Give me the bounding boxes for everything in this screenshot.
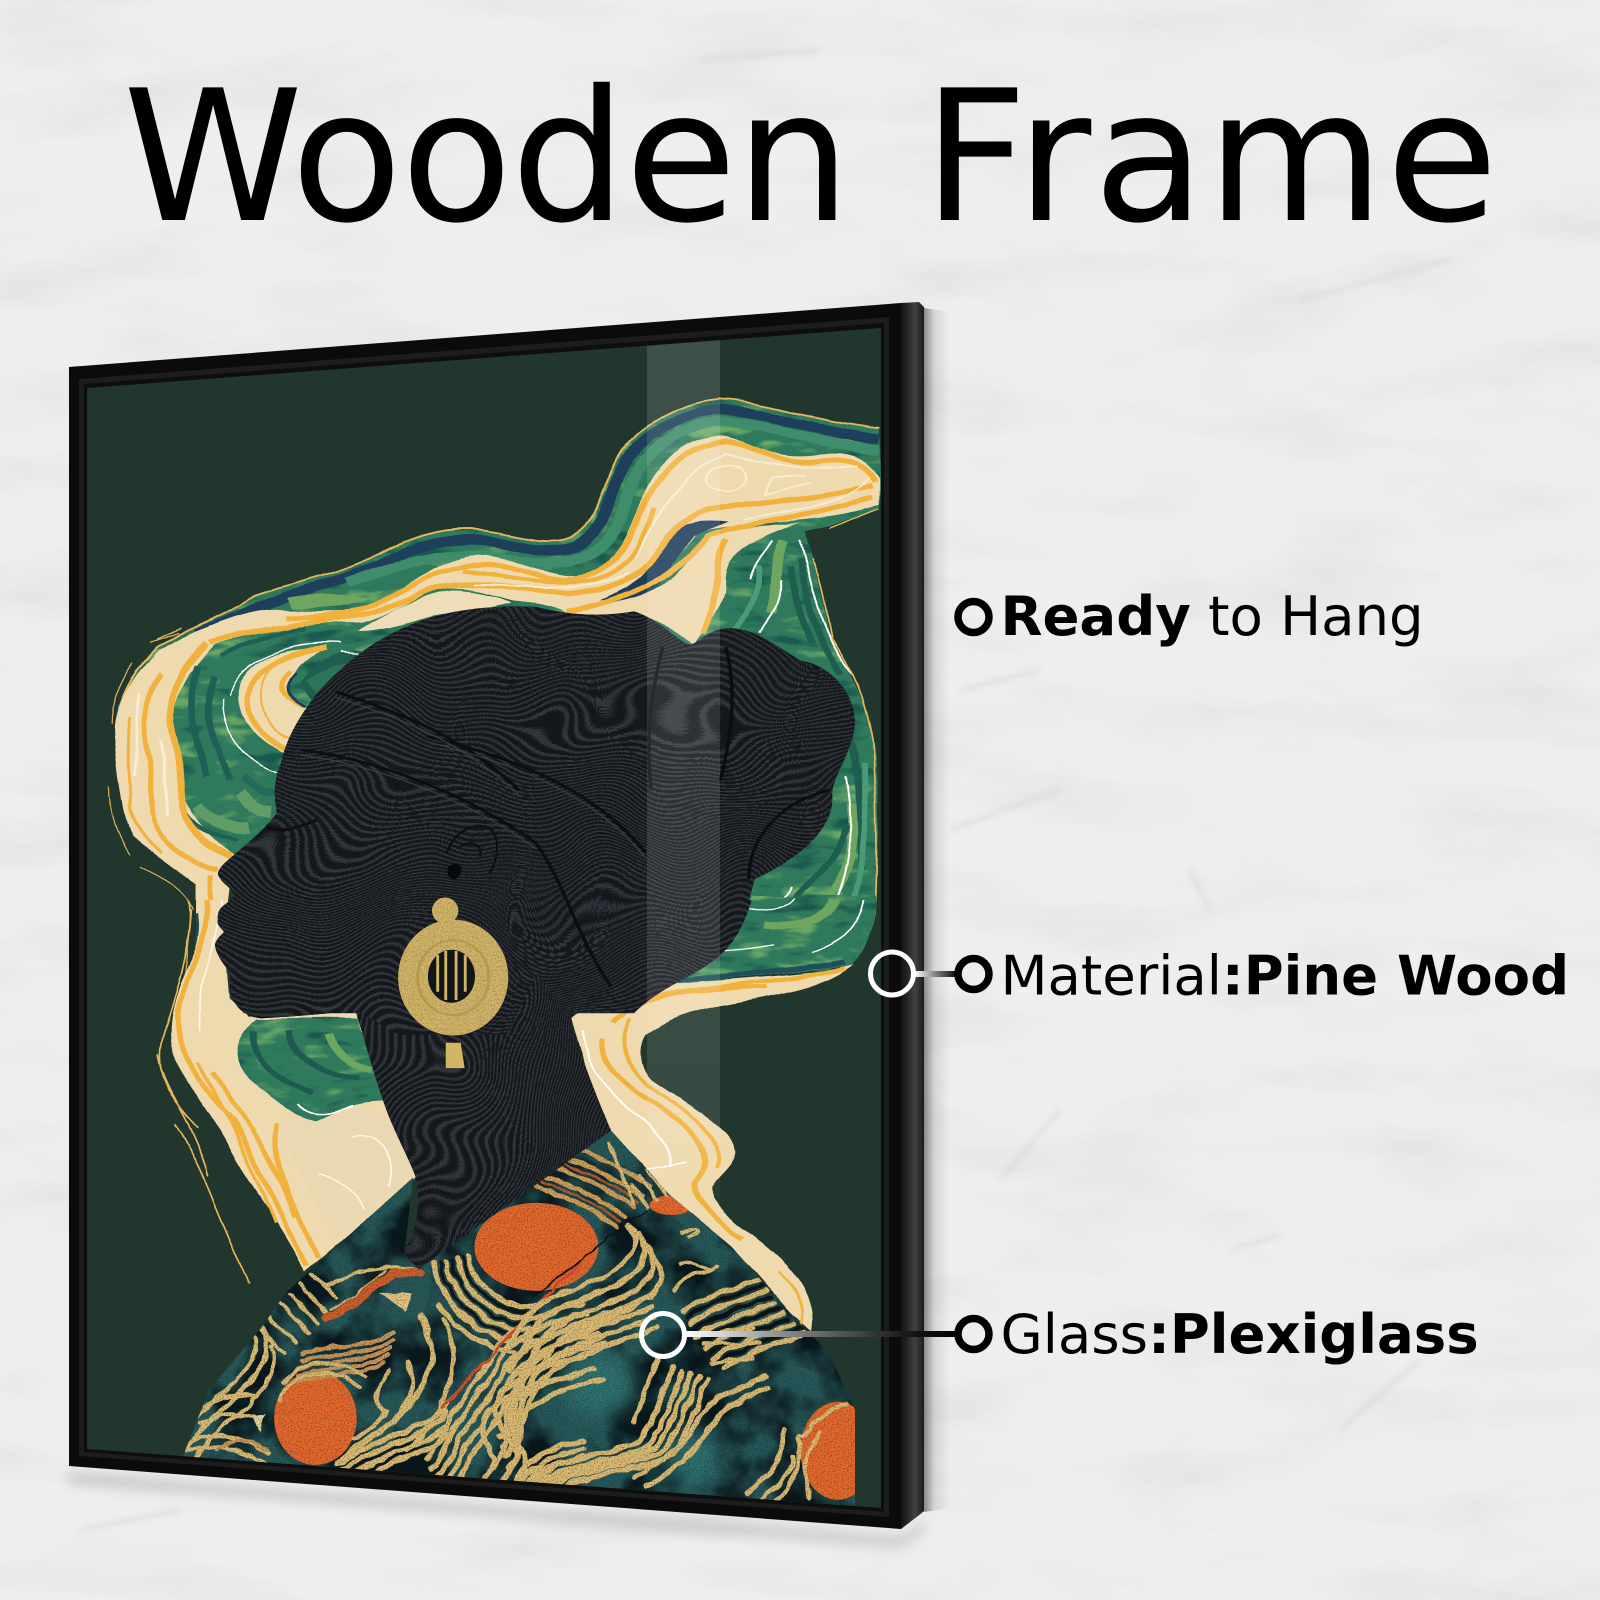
cream lower blob xyxy=(565,522,800,645)
glass reflection strip xyxy=(647,330,720,1215)
callout: material pine wood: Material:Pine Wood xyxy=(1000,944,1569,1008)
strokes in the green, right side xyxy=(772,540,854,924)
callout: ready to hang: Ready to Hang xyxy=(1000,584,1424,648)
left half stripes xyxy=(180,1256,603,1505)
face details: eyelash and ear xyxy=(267,820,497,879)
left cream flow xyxy=(170,900,416,1273)
right half stripes xyxy=(500,1143,847,1500)
title: Wooden xyxy=(123,51,849,263)
silhouette: head, hair bun and neck xyxy=(215,606,855,1269)
patterned kimono xyxy=(184,1130,855,1506)
navy swirl xyxy=(600,521,729,600)
orange circles xyxy=(274,1195,875,1500)
hair folds xyxy=(301,647,829,986)
green behind the bun, lower right xyxy=(686,894,876,978)
teal patches xyxy=(563,1350,720,1485)
gold lines on the band xyxy=(287,442,875,619)
title: Frame xyxy=(923,51,1500,263)
green blob under the jaw xyxy=(237,1018,384,1120)
cream patch below the band xyxy=(358,590,513,631)
flowing hair waves xyxy=(110,399,881,1330)
icon: gold earring xyxy=(398,898,508,1068)
shadow: frame on wall xyxy=(69,308,950,1548)
gold stripes xyxy=(180,1143,847,1505)
wooden frame xyxy=(69,302,924,1529)
artwork: portrait on green ground xyxy=(87,328,881,1508)
right cream flow xyxy=(571,963,855,1330)
cream upper band xyxy=(114,436,880,924)
left flow, crescent and green strokes xyxy=(108,627,362,974)
callout: plexiglass: Glass:Plexiglass xyxy=(1000,1302,1479,1366)
callout: plexiglass xyxy=(642,1302,1479,1366)
